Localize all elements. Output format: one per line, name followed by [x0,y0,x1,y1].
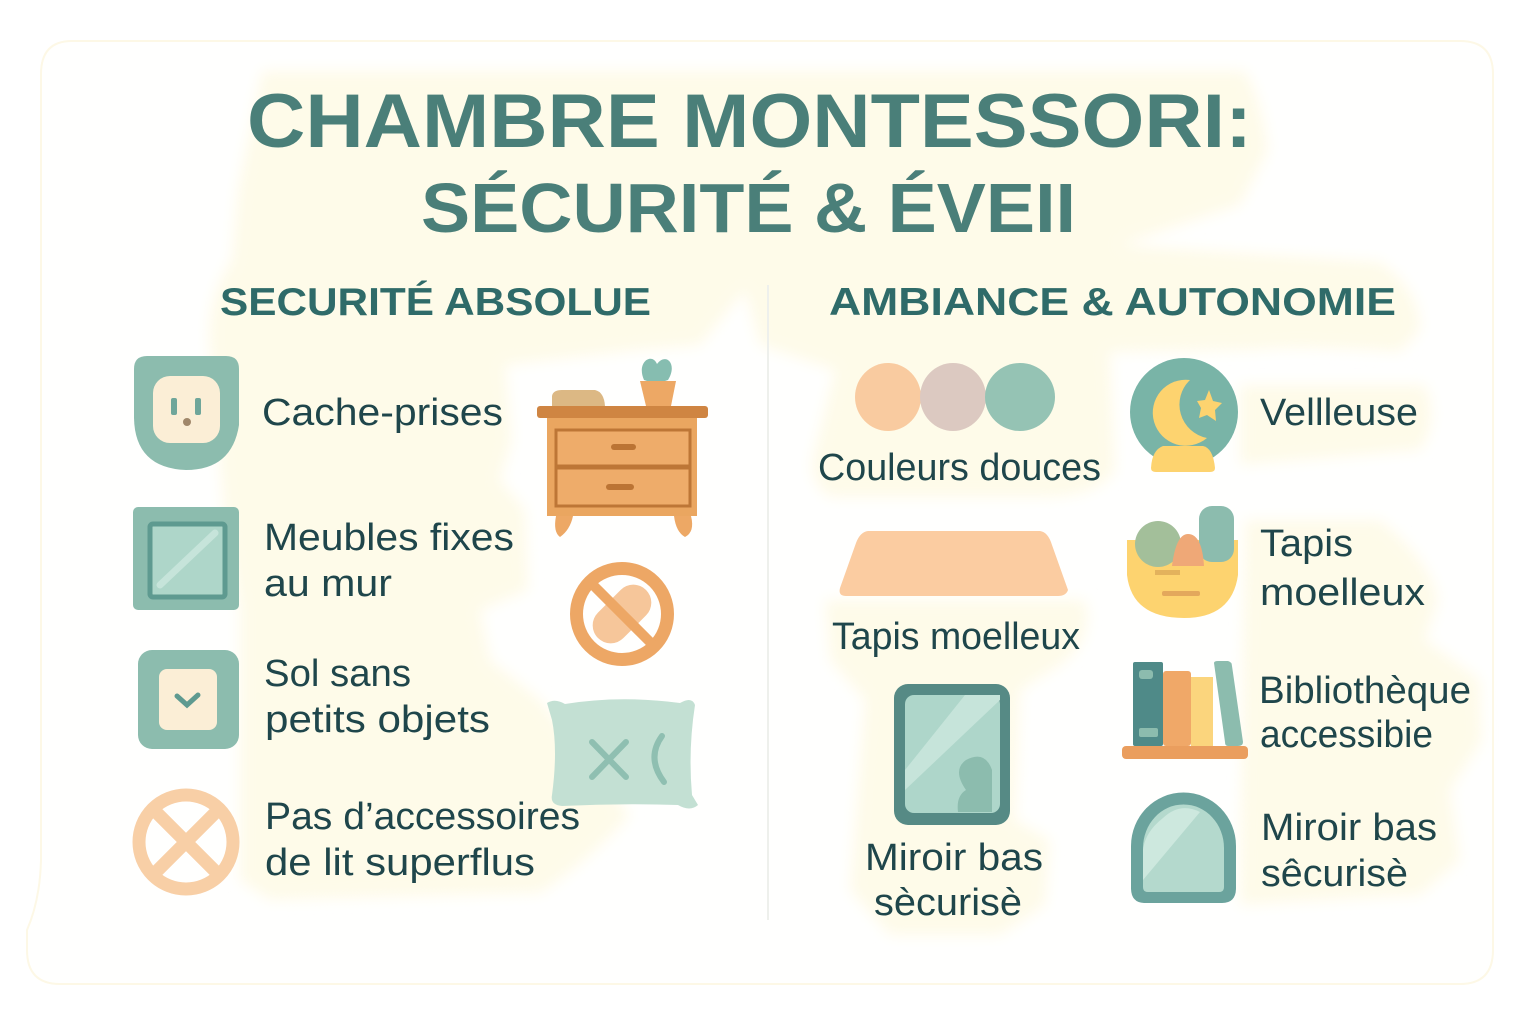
icon: color circles [855,363,1055,431]
label: meubles fixes au mur [264,517,514,605]
icon: wall-mounted frame [133,507,239,610]
label: veilleuse: Vellleuse [1260,392,1418,434]
label: pas d'accessoires de lit superflus: de lit superflus [265,842,535,884]
label: tapis moelleux right: moelleux [1260,572,1425,614]
heading: ambiance et autonomie: AMBIANCE & AUTONOMIE [829,281,1396,324]
icon: outlet cover [134,356,239,470]
label: pas d'accessoires de lit superflus [265,796,580,884]
title: CHAMBRE MONTESSORI: [247,79,1252,164]
label: bibliothèque accessible: accessibie [1260,714,1433,756]
title [247,79,1252,247]
icon: pillow [547,699,698,808]
icon: rug [840,531,1068,596]
label: miroir bas sécurisé right: sêcurisè [1261,853,1408,895]
label: bibliothèque accessible [1259,670,1471,756]
icon: tall mirror [894,684,1010,825]
icon: bookshelf [1122,661,1248,759]
divider [767,285,769,920]
icon: arched mirror [1131,792,1236,903]
label: cache-prises: Cache-prises [262,392,503,434]
heading: sécurité absolue: SECURITÉ ABSOLUE [220,280,651,324]
label: miroir bas sécurisé right: Miroir bas [1261,807,1437,849]
label: tapis moelleux right: Tapis [1260,523,1353,565]
icon: no pacifier [576,568,668,660]
label: couleurs douces: Couleurs douces [818,447,1101,489]
label: miroir bas sécurisé left: Miroir bas [865,837,1043,879]
icon: crossed circle [139,795,233,889]
label: sol sans petits objets: petits objets [265,699,490,741]
label: pas d'accessoires de lit superflus: Pas d’accessoires [265,796,580,838]
label: meubles fixes au mur: au mur [264,563,392,605]
label: tapis moelleux left: Tapis moelleux [832,616,1080,658]
label: miroir bas sécurisé left: sècurisè [874,882,1022,924]
cream wash behind text [209,71,1482,935]
label: sol sans petits objets: Sol sans [264,653,411,695]
label: meubles fixes au mur: Meubles fixes [264,517,514,559]
title: SÉCURITÉ & ÉVEII [421,169,1076,247]
icon: toy basket [1127,506,1238,618]
label: miroir bas sécurisé right [1261,807,1437,895]
label: bibliothèque accessible: Bibliothèque [1259,670,1471,712]
icon: checked floor [138,650,239,749]
label: tapis moelleux right [1260,523,1425,614]
icon: dresser with plant [537,359,708,537]
label: miroir bas sécurisé left [865,837,1043,924]
icon: night light [1130,358,1238,472]
label: sol sans petits objets [264,653,490,741]
